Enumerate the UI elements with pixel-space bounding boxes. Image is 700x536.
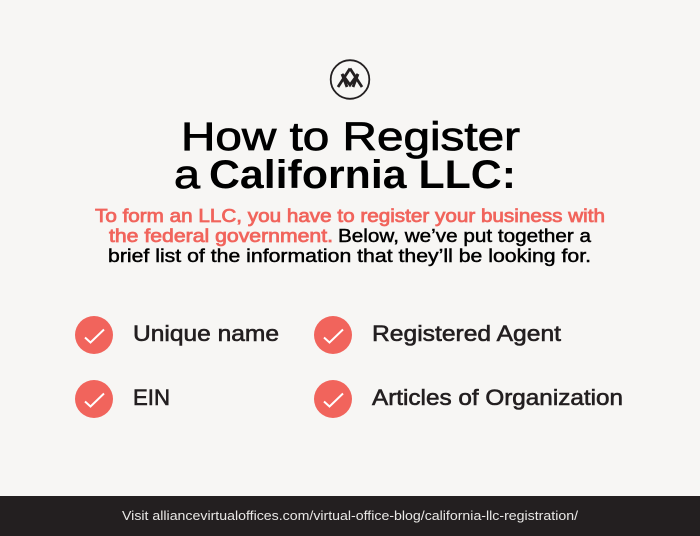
- title: a: [174, 153, 201, 197]
- item: Articles of Organization: Articles of Organization: [372, 385, 623, 410]
- item: Registered Agent: [314, 316, 561, 354]
- intro text: To form an LLC, you have to register your business with: [95, 206, 605, 226]
- item: Registered Agent: Registered Agent: [372, 321, 561, 346]
- checklist: [75, 316, 623, 418]
- item: EIN: [75, 380, 170, 418]
- title: California LLC:: [209, 153, 516, 197]
- footer link text: Visit alliancevirtualoffices.com/virtual-office-blog/california-llc-registration/: [122, 508, 578, 523]
- intro text: Below, we’ve put together a: [338, 226, 592, 246]
- item: EIN: EIN: [133, 385, 170, 410]
- intro text: the federal government.: [109, 226, 333, 246]
- icon: logo: [331, 60, 369, 99]
- title: How to Register: [181, 115, 520, 159]
- title: [174, 115, 520, 197]
- item: Unique name: Unique name: [133, 321, 279, 346]
- footer bar: [0, 496, 700, 536]
- intro text: brief list of the information that they’ll be looking for.: [108, 246, 591, 266]
- item: Unique name: [75, 316, 279, 354]
- item: Articles of Organization: [314, 380, 623, 418]
- intro text: [95, 206, 605, 266]
